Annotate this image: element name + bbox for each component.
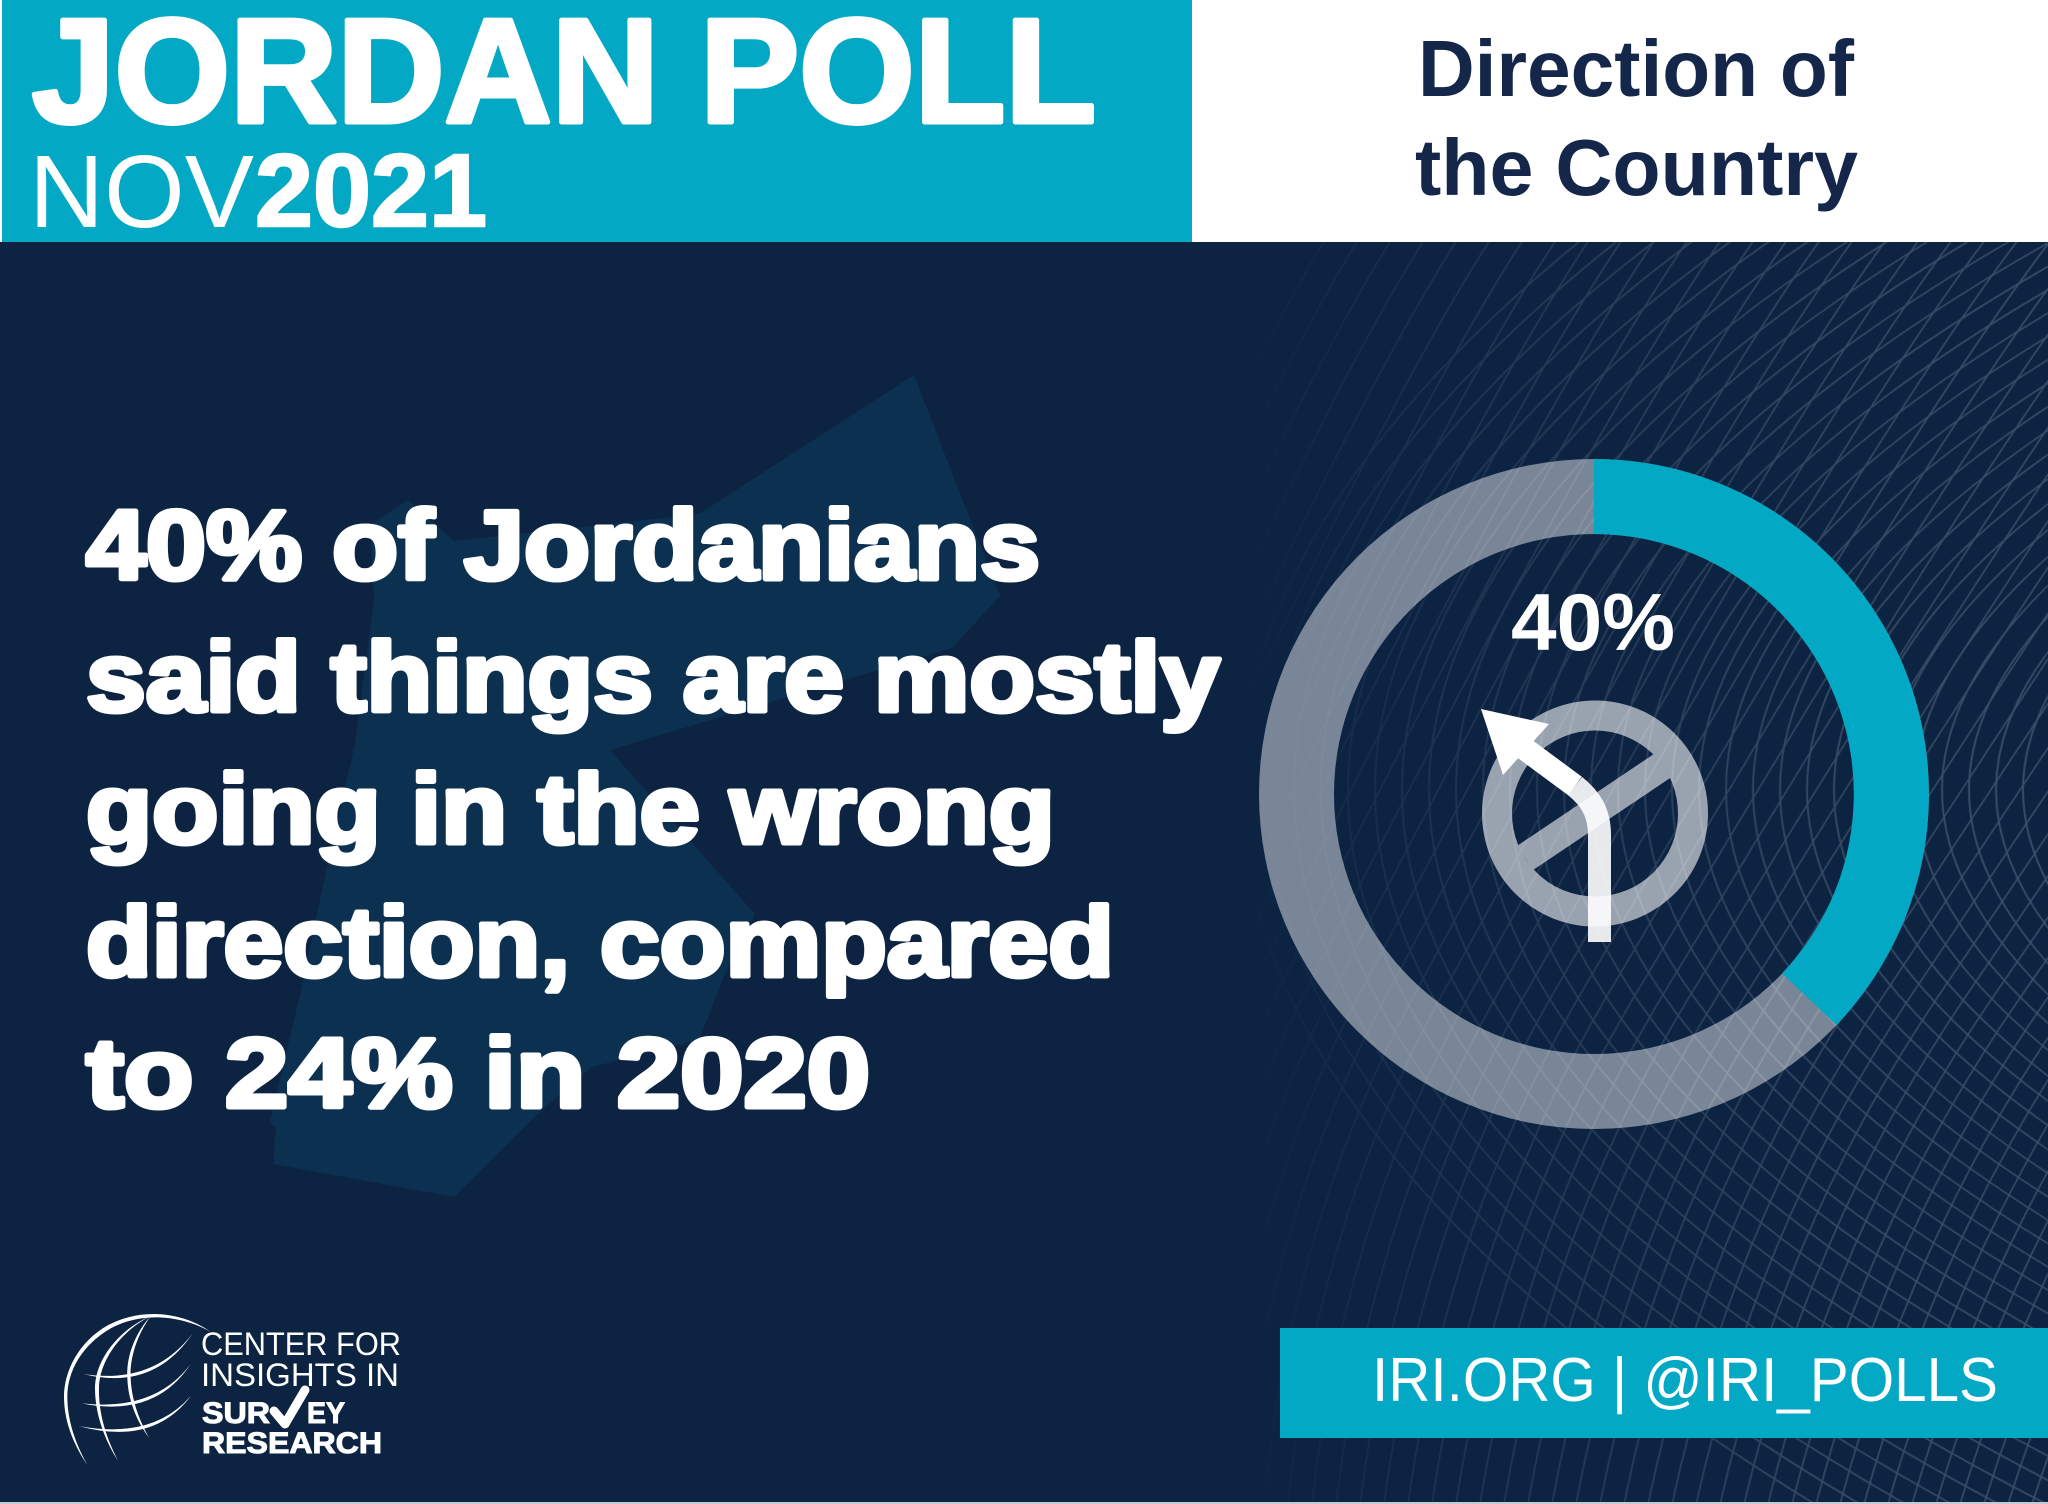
subtitle: Nov 2021: NOV: [29, 134, 254, 249]
main statement text: to 24% in 2020: [86, 1018, 870, 1128]
footer links text: IRI.ORG | @IRI_POLLS: [1372, 1346, 1998, 1415]
main statement text: direction, compared: [86, 887, 1114, 997]
icon: check mark: [274, 1390, 305, 1424]
donut chart: remaining grey ring: [1259, 459, 1929, 1129]
donut chart: 40% teal segment: [1594, 459, 1929, 1025]
donut value: 40%: 40%: [1511, 578, 1675, 668]
subtitle: Nov 2021: 2021: [255, 133, 487, 248]
logo wordmark: CENTER FOR: [201, 1326, 401, 1362]
logo wordmark: [201, 1326, 401, 1460]
main statement text: 40% of Jordanians: [86, 490, 1040, 600]
topic heading: [1415, 24, 1858, 212]
header: teal title panel: [0, 0, 1192, 249]
subtitle: Nov 2021: [29, 133, 487, 249]
header: white topic panel: [1192, 0, 2048, 242]
topic heading: Direction of: [1418, 24, 1854, 113]
logo: Center for Insights in Survey Research: [64, 1314, 401, 1465]
icon: globe: [64, 1314, 210, 1465]
main statement text: going in the wrong: [86, 754, 1055, 864]
topic heading: the Country: [1415, 123, 1858, 212]
logo wordmark: SUR: [202, 1397, 270, 1430]
logo wordmark: RESEARCH: [202, 1427, 382, 1460]
map of Jordan silhouette: [270, 375, 1000, 1197]
icon: arrow turning left: [1481, 709, 1600, 942]
icon: prohibited wrong-direction arrow: [1481, 709, 1693, 942]
logo wordmark: EY: [307, 1397, 345, 1430]
main statement text: [86, 490, 1220, 1128]
main statement text: said things are mostly: [86, 622, 1220, 732]
footer link bar: [1280, 1328, 2048, 1438]
logo wordmark: INSIGHTS IN: [201, 1357, 399, 1393]
icon: prohibition circle: [1497, 716, 1693, 912]
